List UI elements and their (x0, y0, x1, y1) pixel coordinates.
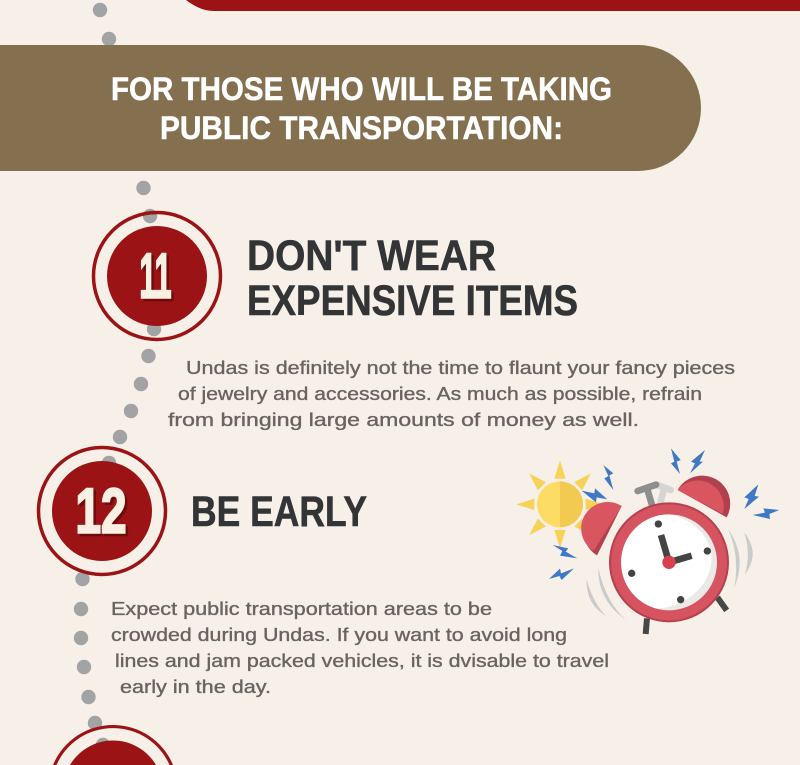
number badge 11 (94, 212, 220, 340)
icon: sun and alarm clock (516, 448, 779, 634)
heading: don't wear expensive items: DON'T WEAR (247, 232, 496, 280)
icon: clock handle (638, 485, 671, 505)
icon: clock bells (581, 476, 730, 555)
heading: be early: BE EARLY (191, 488, 367, 536)
dotted path (74, 3, 161, 752)
icon: clock legs (646, 597, 727, 634)
number badge 11: 11 (142, 244, 174, 314)
heading: don't wear expensive items: EXPENSIVE ITEMS (247, 277, 578, 325)
icon: clock body (609, 502, 729, 622)
body text: item 12: early in the day. (120, 677, 271, 697)
banner: public transportation heading (0, 45, 701, 171)
number badge 13, cropped (53, 725, 173, 765)
number badge 11: 11 (140, 242, 172, 312)
icon: sun (516, 461, 604, 548)
body text: item 12: crowded during Undas. If you want to avoid long (111, 625, 567, 645)
icon: vibration lines (587, 529, 753, 620)
red top bar (186, 0, 800, 11)
body text: item 11: of jewelry and accessories. As much as possible, refrain (178, 384, 702, 404)
body text: item 12: lines and jam packed vehicles, it is dvisable to travel (115, 651, 609, 671)
number badge 12: 12 (76, 476, 126, 546)
body text: item 11: Undas is definitely not the time to flaunt your fancy pieces (186, 358, 735, 378)
number badge 12 (38, 448, 166, 574)
body text: item 12: Expect public transportation areas to be (111, 599, 492, 619)
body text: item 11: from bringing large amounts of money as well. (168, 410, 639, 430)
icon: lightning bolts (549, 448, 779, 580)
banner heading text: PUBLIC TRANSPORTATION: (160, 110, 563, 146)
banner heading text: FOR THOSE WHO WILL BE TAKING (111, 71, 612, 107)
number badge 12: 12 (78, 479, 129, 549)
